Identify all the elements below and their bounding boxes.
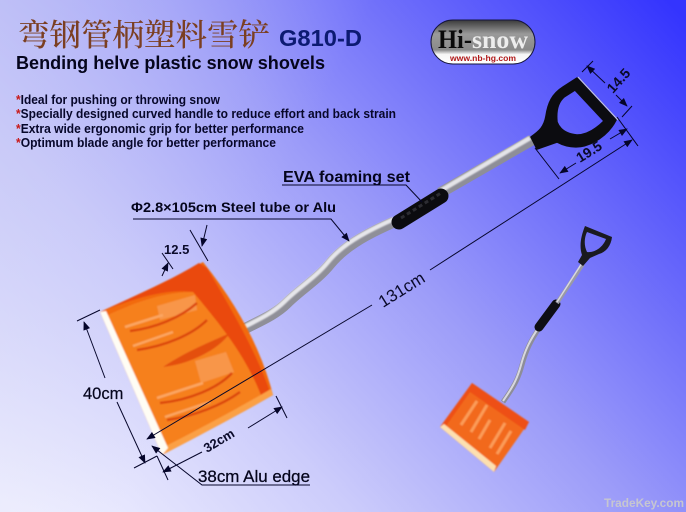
foam grip [399, 196, 441, 222]
dimension: blade width 40cm: 40cm [83, 385, 123, 403]
logo: Hi-snow badge: snow [472, 27, 528, 54]
logo: Hi-snow badge: www.nb-hg.com [449, 53, 516, 63]
dimension: overall length 131cm [147, 140, 632, 439]
small product photo shovel [440, 226, 612, 472]
feature list: *Extra wide ergonomic grip for better performance [16, 122, 304, 136]
dimension: blade depth 12.5: 12.5 [164, 242, 189, 257]
callout: steel tube spec [131, 200, 349, 241]
dimension: blade width 40cm [77, 310, 157, 468]
main shovel [100, 77, 618, 455]
heading: English product name: Bending helve plastic snow shovels [16, 53, 325, 73]
feature list: *Optimum blade angle for better performance [16, 136, 276, 150]
dimension: handle width 19.5: 19.5 [573, 137, 605, 166]
callout: steel tube spec: Φ2.8×105cm Steel tube or Alu [131, 200, 336, 215]
title: Chinese name and model number: G810-D [279, 25, 362, 51]
dimension: overall length 131cm: 131cm [375, 268, 428, 311]
callout: EVA foaming set [282, 169, 422, 202]
dimension: blade length 32cm [157, 396, 287, 480]
dimension: handle height 14.5 [582, 61, 634, 117]
dimension: blade length 32cm: 32cm [201, 426, 237, 456]
callout: EVA foaming set: EVA foaming set [283, 169, 411, 186]
feature list [16, 93, 396, 150]
shaft [240, 222, 394, 331]
logo: Hi-snow badge: Hi- [438, 25, 472, 54]
D handle [531, 78, 616, 149]
dimension: blade depth 12.5 [162, 225, 208, 276]
blade ribs [157, 295, 197, 320]
callout: 38cm Alu edge: 38cm Alu edge [198, 468, 310, 486]
dimension: handle width 19.5 [535, 117, 638, 179]
feature list: *Specially designed curved handle to reduce effort and back strain [16, 107, 396, 121]
callout: 38cm Alu edge [152, 446, 310, 486]
logo: Hi-snow badge [431, 20, 535, 64]
title: Chinese name and model number: 弯钢管柄塑料雪铲 [18, 10, 270, 55]
feature list: *Ideal for pushing or throwing snow [16, 93, 220, 107]
watermark: TradeKey.com: TradeKey.com [604, 498, 684, 510]
blade [100, 262, 273, 455]
dimension: handle height 14.5: 14.5 [603, 65, 634, 96]
